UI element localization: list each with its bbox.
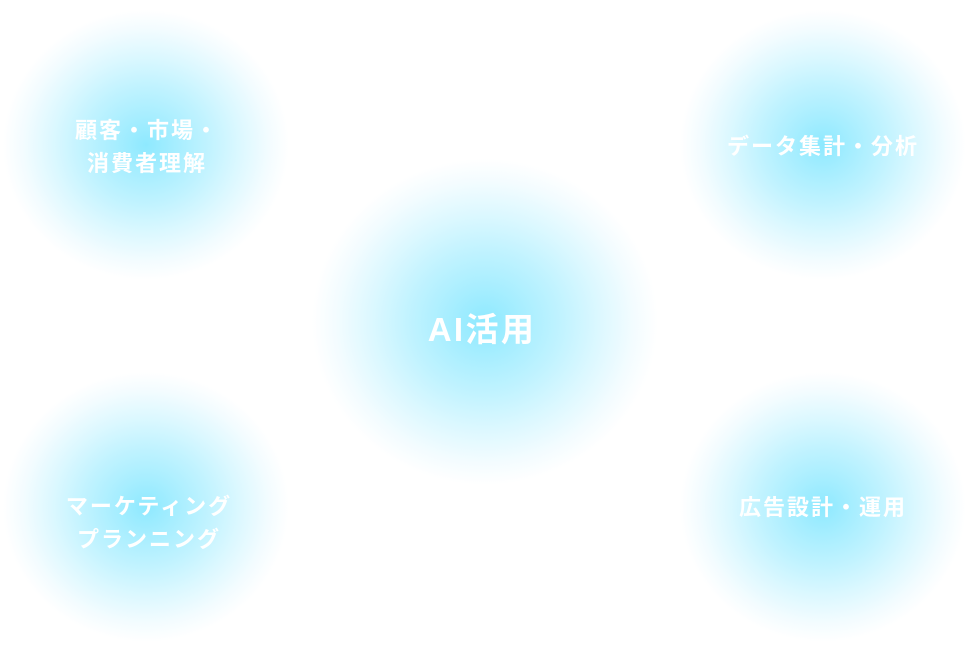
blob: center AI usage bbox=[312, 159, 658, 485]
blob: marketing planning bbox=[3, 372, 289, 642]
blob: customer and market understanding bbox=[3, 10, 289, 280]
label: customer and market understanding bbox=[75, 118, 219, 176]
label: data aggregation and analysis: データ集計・分析 bbox=[727, 134, 919, 159]
blob: ad design and operation bbox=[680, 372, 966, 642]
label: marketing planning: プランニング bbox=[77, 527, 221, 552]
label: marketing planning bbox=[66, 494, 232, 552]
label: ad design and operation: 広告設計・運用 bbox=[739, 495, 907, 520]
label: customer and market understanding: 顧客・市場・ bbox=[75, 118, 219, 143]
label: center AI usage: AI活用 bbox=[428, 311, 536, 348]
label: marketing planning: マーケティング bbox=[66, 494, 232, 519]
blob: data aggregation and analysis bbox=[680, 10, 966, 280]
label: customer and market understanding: 消費者理解 bbox=[87, 151, 207, 176]
